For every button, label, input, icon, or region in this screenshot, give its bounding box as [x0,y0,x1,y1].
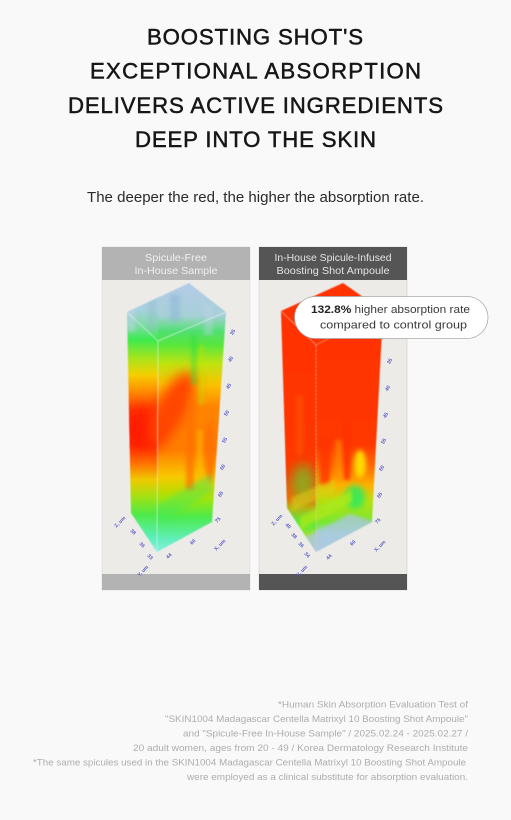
3D heat map: control [120,283,226,560]
axis labels: X, um [373,539,388,553]
title: DEEP INTO THE SKIN [135,127,376,152]
panel footer bar [102,574,250,590]
axis labels: 60 [219,463,227,471]
axis labels: Z, um [113,515,128,529]
axis labels: 38 [290,532,298,541]
axis labels: 45 [225,382,233,390]
axis labels: 44 [165,552,174,560]
panel background [259,247,407,590]
axis labels: Z, um [270,513,285,527]
footnote: and "Spicule-Free In-House Sample" / 2025.02.24 - 2025.02.27 / [183,728,468,738]
panel background [102,247,250,590]
vertical stripes [191,335,197,385]
panel header: In-House Spicule-Infused [274,252,392,264]
axis labels: X, um [213,538,228,552]
panel header [102,247,250,280]
panel header: Spicule-Free [145,252,207,264]
axis labels: 55 [380,437,388,445]
panel: spicule-free sample [102,247,250,590]
axis labels: 75 [214,516,223,524]
title: DELIVERS ACTIVE INGREDIENTS [68,93,443,118]
subtitle: The deeper the red, the higher the absorption rate. [87,189,424,206]
footnote [33,698,468,782]
axis labels: 38 [129,528,137,537]
axis labels: 35 [386,357,394,365]
panel footer bar [259,574,407,590]
panel header [259,247,407,280]
callout: 132.8% higher absorption [294,296,488,338]
axis labels [270,357,394,578]
axis labels: 45 [382,411,390,419]
axis labels: 40 [284,522,292,531]
axis labels: 33 [146,553,154,562]
panel: spicule-infused ampoule [259,247,407,590]
axis labels: 65 [217,490,225,498]
footnote: "SKIN1004 Madagascar Centella Matrixyl 10 Boosting Shot Ampoule" [165,713,468,724]
axis labels: 35 [229,328,237,336]
axis labels: 75 [374,517,383,525]
vertical stripes [320,440,330,485]
diagonal bands [292,479,335,511]
title: BOOSTING SHOT'S [147,24,363,50]
axis labels: 40 [384,384,392,392]
axis labels: 36 [297,541,305,550]
cube edges [127,312,226,552]
axis labels: Y, um [137,564,150,578]
3D heat map: ampoule [280,282,382,552]
axis labels: 40 [227,355,235,363]
title: EXCEPTIONAL ABSORPTION [90,58,421,84]
callout: 132.8% higher absorption: 132.8% higher absorption rate [311,304,470,316]
panel header: In-House Sample [134,265,218,277]
axis labels [113,328,237,578]
axis labels: Y, um [296,564,309,578]
footnote: 20 adult women, ages from 20 - 49 / Korea Dermatology Research Institute [133,742,468,753]
panel header: Boosting Shot Ampoule [276,265,390,277]
axis labels: 65 [376,491,384,499]
footnote: *The same spicules used in the SKIN1004 Madagascar Centella Matrixyl 10 Boosting Shot Ampoule [33,756,466,768]
axis labels: 60 [349,539,358,547]
axis labels: 44 [325,553,334,561]
olive patch [291,464,315,500]
title [68,24,443,152]
footnote: *Human Skin Absorption Evaluation Test of [278,698,468,710]
callout: 132.8% higher absorption: compared to control group [320,320,467,332]
cube edges [281,311,383,552]
axis labels: 60 [378,464,386,472]
pale top stripes [127,310,136,334]
axis labels: 55 [221,436,229,444]
footnote: were employed as a clinical substitute for absorption evaluation. [186,771,468,782]
axis labels: 36 [138,541,146,550]
axis labels: 60 [189,538,198,546]
axis labels: 34 [303,551,311,560]
diagonal red bloom [120,410,164,450]
axis labels: 50 [223,409,231,417]
